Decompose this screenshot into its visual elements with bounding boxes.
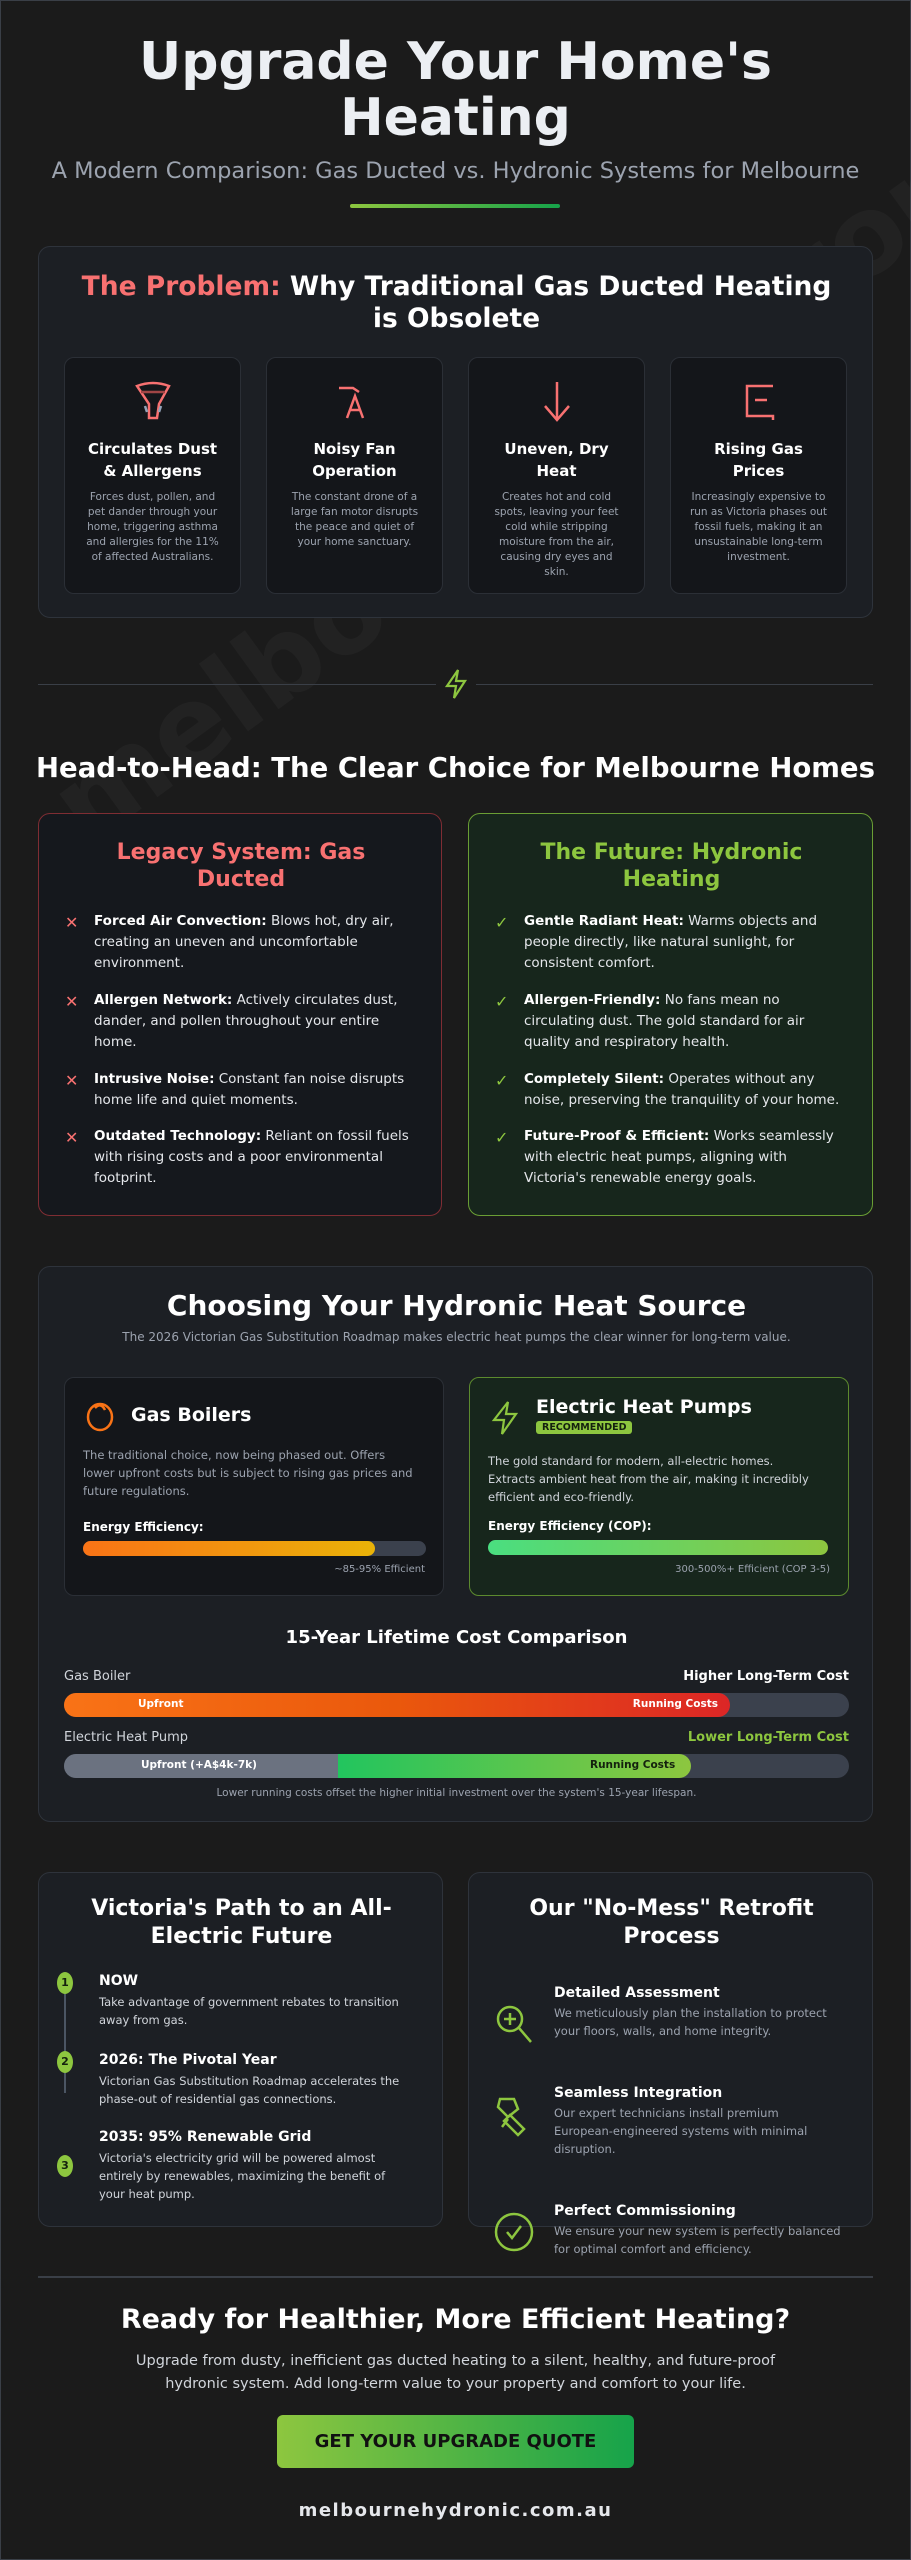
icon: lightning <box>492 1401 518 1435</box>
card: prices: Prices <box>733 462 784 480</box>
heat source heading: Choosing Your Hydronic Heat Source <box>167 1289 746 1322</box>
panel: future hydronic: ✓ <box>495 1071 508 1090</box>
step: integration <box>496 2085 807 2156</box>
gas efficiency bar <box>83 1541 426 1556</box>
panel: legacy gas ducted: Outdated Technology: Reliant on fossil fuels with rising costs and a poor environmental footprint. <box>94 1128 409 1186</box>
cop value: 300-500%+ Efficient (COP 3-5) <box>675 1564 830 1575</box>
step: integration: European-engineered systems with minimal disruption. <box>554 2124 807 2156</box>
icon: bill <box>746 384 774 420</box>
legacy heading: Legacy System: Gas <box>117 840 365 865</box>
card: dust: Forces dust, pollen, and pet dander through your home, triggering asthma and allergies for the 11% of affected Australians. <box>86 491 219 563</box>
retrofit heading: Our "No-Mess" Retrofit <box>529 1896 814 1921</box>
panel: timeline: 2035: 95% Renewable Grid <box>99 2129 311 2145</box>
panel: problem <box>38 246 873 618</box>
heat source subtitle: The 2026 Victorian Gas Substitution Roadmap makes electric heat pumps the clear winner for long-term value. <box>122 1330 791 1344</box>
future heading: Heating <box>623 867 720 892</box>
cta button <box>277 2415 634 2468</box>
card: noise: The constant drone of a large fan motor disrupts the peace and quiet of your home sanctuary. <box>291 491 418 548</box>
gas efficiency value: ~85-95% Efficient <box>334 1564 425 1575</box>
icon: arrow down <box>544 382 570 422</box>
cop label: Energy Efficiency (COP): <box>488 1519 652 1533</box>
retrofit heading <box>529 1896 814 1949</box>
cta heading: Ready for Healthier, More Efficient Heating? <box>121 2304 790 2335</box>
chart: cost comparison: Running Costs <box>590 1759 675 1771</box>
future heading: The Future: Hydronic <box>541 840 802 865</box>
panel: timeline: Take advantage of government rebates to transition away from gas. <box>99 1995 399 2027</box>
panel: timeline: your heat pump. <box>99 2187 195 2201</box>
badge: recommended: RECOMMENDED <box>542 1422 626 1433</box>
panel: timeline: 2026: The Pivotal Year <box>99 2052 277 2068</box>
title <box>139 32 772 148</box>
chart: cost comparison: Running Costs <box>633 1698 718 1710</box>
panel: legacy gas ducted: ✕ <box>65 913 78 932</box>
panel: future hydronic: ✓ <box>495 992 508 1011</box>
list: legacy <box>65 913 409 1186</box>
title: Upgrade Your Home's <box>139 32 772 92</box>
panel: legacy gas ducted: ✕ <box>65 992 78 1011</box>
panel: future hydronic: Gentle Radiant Heat: Warms objects and people directly, like natural sunlight, for consistent comfort. <box>524 913 817 971</box>
panel: legacy gas ducted: ✕ <box>65 1071 78 1090</box>
card: prices: Rising Gas <box>714 440 803 458</box>
step: assessment <box>496 1985 827 2043</box>
panel: future hydronic: Victoria's renewable energy goals. <box>524 1170 756 1186</box>
panel: timeline: Victorian Gas Substitution Roadmap accelerates the phase-out of residential gas connections. <box>99 2074 399 2106</box>
panel: timeline: entirely by renewables, maximizing the benefit of <box>99 2169 385 2183</box>
step: integration: Our expert technicians install premium <box>554 2106 779 2120</box>
card: dust: Circulates Dust & Allergens <box>88 440 217 480</box>
future heading <box>540 840 802 892</box>
panel: future hydronic: ✓ <box>495 913 508 932</box>
retrofit heading: Process <box>623 1924 720 1949</box>
heat pumps desc <box>488 1454 809 1504</box>
cta text: Upgrade from dusty, inefficient gas ducted heating to a silent, healthy, and future-proof hydronic system. Add long-term value to your property and comfort to your life. <box>136 2353 775 2392</box>
chart: cost comparison: Upfront (+A$4k-7k) <box>141 1759 257 1771</box>
problem heading: The Problem: Why Traditional Gas Ducted Heating <box>82 271 831 302</box>
gas efficiency label: Energy Efficiency: <box>83 1520 204 1534</box>
accent line <box>350 204 560 208</box>
cta button: GET YOUR UPGRADE QUOTE <box>315 2431 596 2452</box>
panel: legacy gas ducted: Allergen Network: Actively circulates dust, dander, and pollen throughout your entire home. <box>94 992 398 1050</box>
icon: fan <box>339 386 364 418</box>
gas boilers desc: lower upfront costs but is subject to rising gas prices and future regulations. <box>83 1466 413 1498</box>
panel: timeline: 1 <box>61 1976 69 1989</box>
card: gas boilers <box>64 1377 444 1596</box>
panel: legacy gas ducted: Intrusive Noise: Constant fan noise disrupts home life and quiet moments. <box>94 1071 404 1108</box>
card: electric heat pumps <box>469 1377 849 1596</box>
heading: head-to-head: Head-to-Head: The Clear Choice for Melbourne Homes <box>36 752 875 784</box>
cost comparison heading: 15-Year Lifetime Cost Comparison <box>286 1627 627 1648</box>
icon: filter <box>135 382 171 420</box>
card: noise: Noisy Fan Operation <box>312 440 397 480</box>
chart: cost comparison: Lower running costs offset the higher initial investment over the system's 15-year lifespan. <box>217 1787 696 1799</box>
chart: cost comparison: Electric Heat Pump <box>64 1730 188 1745</box>
card: uneven: Creates hot and cold spots, leaving your feet cold while stripping moisture from the air, causing dry eyes and skin. <box>494 491 619 578</box>
panel: retrofit process <box>468 1872 873 2227</box>
timeline heading: Victoria's Path to an All- <box>91 1896 392 1921</box>
step: assessment: Detailed Assessment <box>554 1985 720 2001</box>
card: dust <box>64 357 241 594</box>
panel: future hydronic: Future-Proof & Efficient: Works seamlessly with electric heat pumps, aligning with <box>524 1128 834 1165</box>
chart: cost comparison <box>64 1669 849 1799</box>
panel: timeline: Victoria's electricity grid will be powered almost <box>99 2151 375 2165</box>
gas boilers desc <box>82 1448 413 1498</box>
footer url: melbournehydronic.com.au <box>299 2500 612 2521</box>
step: commissioning: We ensure your new system is perfectly balanced for optimal comfort and efficiency. <box>554 2224 841 2256</box>
subtitle: A Modern Comparison: Gas Ducted vs. Hydronic Systems for Melbourne <box>52 158 859 184</box>
heat pumps title: Electric Heat Pumps <box>536 1396 752 1418</box>
card: uneven <box>468 357 645 594</box>
card: uneven: Heat <box>536 462 577 480</box>
panel: timeline <box>38 1872 443 2227</box>
card: noise <box>266 357 443 594</box>
card: prices: Increasingly expensive to run as Victoria phases out fossil fuels, making it an unsustainable long-term investment. <box>690 491 827 563</box>
panel: timeline: 3 <box>61 2159 69 2172</box>
panel: future hydronic: Allergen-Friendly: No fans mean no circulating dust. The gold standard for air quality and respiratory health. <box>524 992 804 1050</box>
panel: timeline: 2 <box>61 2055 69 2068</box>
icon: flame <box>86 1402 114 1432</box>
chart: cost comparison: Higher Long-Term Cost <box>683 1669 849 1684</box>
list: future <box>495 913 839 1186</box>
step: assessment: We meticulously plan the installation to protect your floors, walls, and home integrity. <box>554 2006 827 2038</box>
step: integration: Seamless Integration <box>554 2085 722 2101</box>
step: commissioning <box>494 2203 841 2256</box>
problem heading: is Obsolete <box>373 303 540 334</box>
panel: heat source <box>38 1266 873 1822</box>
heat pumps desc: efficient and eco-friendly. <box>488 1490 634 1504</box>
legacy heading <box>117 840 365 892</box>
panel: legacy gas ducted: Forced Air Convection: Blows hot, dry air, creating an uneven and uncomfortable environment. <box>94 913 394 971</box>
gas boilers desc: The traditional choice, now being phased out. Offers <box>83 1448 385 1462</box>
cop bar <box>488 1540 828 1555</box>
panel: legacy gas ducted: ✕ <box>65 1128 78 1147</box>
panel: timeline: NOW <box>99 1973 138 1989</box>
timeline items <box>57 1972 399 2201</box>
problem heading <box>82 271 831 334</box>
heat pumps desc: The gold standard for modern, all-electric homes. <box>488 1454 773 1468</box>
heat pumps desc: Extracts ambient heat from the air, making it incredibly <box>488 1472 809 1486</box>
card: uneven: Uneven, Dry <box>504 440 609 458</box>
step: commissioning: Perfect Commissioning <box>554 2203 736 2219</box>
panel: future hydronic: ✓ <box>495 1128 508 1147</box>
title: Heating <box>340 88 571 148</box>
chart: cost comparison: Lower Long-Term Cost <box>688 1730 849 1745</box>
chart: cost comparison: Upfront <box>138 1698 184 1710</box>
chart: cost comparison: Gas Boiler <box>64 1669 130 1684</box>
card: prices <box>670 357 847 594</box>
icon: lightning divider <box>436 668 476 700</box>
timeline heading: Electric Future <box>151 1924 332 1949</box>
panel: future hydronic: Completely Silent: Operates without any noise, preserving the tranquility of your home. <box>524 1071 839 1108</box>
legacy heading: Ducted <box>197 867 285 892</box>
timeline heading <box>91 1896 392 1949</box>
panel: future hydronic <box>468 813 873 1216</box>
gas boilers title: Gas Boilers <box>131 1404 251 1426</box>
panel: legacy gas ducted <box>38 813 442 1216</box>
